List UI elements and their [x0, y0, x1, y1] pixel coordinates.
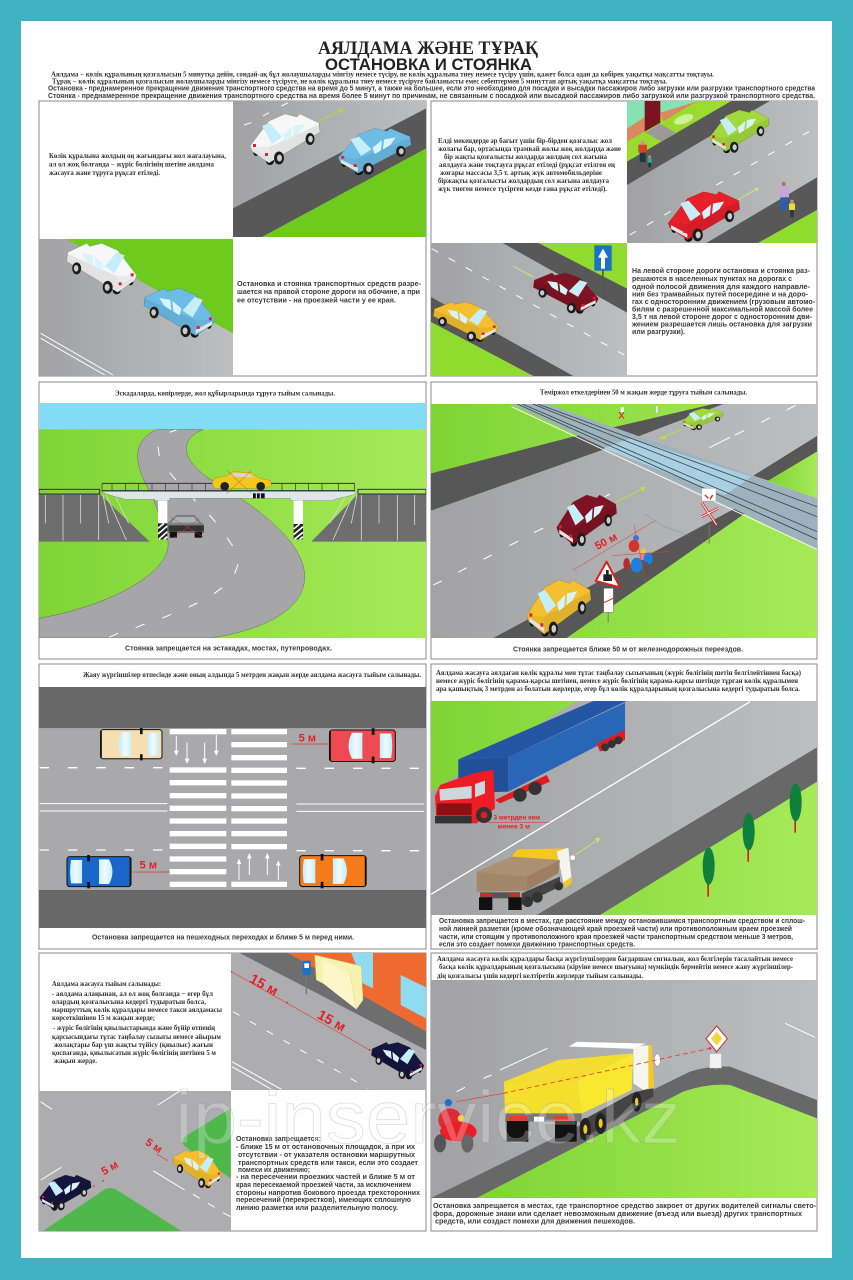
icon: motorcyclist [434, 1099, 477, 1153]
illustration: bus stop with 15 m marks: 15 м [315, 1006, 349, 1035]
text: Kazakh rule [437, 955, 794, 980]
text: Russian rule: одной полосой движения для каждого направле- [632, 283, 811, 291]
watermark: ip-inservice.kz [175, 1076, 681, 1159]
definitions text: Аялдама − көлік құралының қозғалысын 5 минутқа дейін, сондай-ақ бұл жолаушыларды мінгізу немесе түсіру, не көлік құралына тиеу немесе түсіру үшін, қажет болса одан да көбірек уақытқа мақсатты тоқтауы. [51, 70, 714, 78]
illustration: one-way road with sign [431, 243, 627, 376]
text: Kazakh rule: Аялдама жасауға аялдаған көлік құралы мен тұтас таңбалау сызығының (жүріс бөлігінің шетін белгілейтіннен басқа) [436, 669, 802, 677]
icon: grey car with cross [168, 516, 204, 538]
text: Russian rule: помехи их движению; [238, 1167, 310, 1174]
text: Russian rule: решаются в населенных пунктах на дорогах с [632, 276, 792, 283]
truck: red cab with blue trailer [435, 701, 627, 823]
definitions text: Стоянка - преднамеренное прекращение движения транспортного средства на время более 5 минут по причинам, не связанным с посадкой или высадкой пассажиров либо загрузкой или разгрузкой транспортного средства. [48, 92, 815, 100]
text: Russian rule: отсутствии - от указателя остановки маршрутных [238, 1152, 415, 1159]
illustration: intersection with 5 m marks: 5 м [100, 1159, 120, 1178]
text: Kazakh rule: дің қозғалысы үшін кедергі келтіретін жерлерде тыйым салынады. [437, 972, 643, 980]
caption: Russian: Стоянка запрещается на эстакадах, мостах, путепроводах. [125, 646, 332, 652]
panel: stopping on the right side [39, 101, 426, 376]
text: Kazakh rule [436, 669, 802, 693]
text: Russian rule: пересечений (перекрестков), имеющих сплошную [236, 1196, 411, 1204]
text: Kazakh rule: жасауға және тұруға рұқсат етіледі. [49, 169, 160, 177]
label: under 3 metres: 3 метрден кем [493, 814, 540, 821]
text: Kazakh rule: ал ол жоқ болғанда − жүріс бөлігінің шетіне аялдама [49, 160, 214, 168]
illustration: pedestrian crossing from above [39, 687, 426, 928]
illustration: street with building and pedestrians [627, 101, 817, 243]
text: Russian rule: стороны напротив бокового проезда трехсторонних [236, 1189, 420, 1197]
text: Kazakh rule: - жүріс бөлігінің қиылыстарында және бүйір өтпенің [53, 1024, 215, 1032]
label: 5 m top [291, 733, 330, 745]
text: Kazakh rule: - аялдама алаңынан, ал ол жоқ болғанда − егер бұл [52, 990, 213, 998]
text: Russian rule: На левой стороне дороги остановка и стоянка раз- [632, 267, 811, 275]
text: Kazakh rule: басқа көлік құралдарының қозғалысына (кіруіне немесе шығуына) мүмкіндік бермейтін немесе жаяу жүргіншілер- [439, 963, 794, 971]
text: Russian rule: края пересекаемой проезжей части, за исключением [236, 1181, 411, 1189]
text: Kazakh rule: біржақты қозғалысты жолдардың сол жағына аялдауға [438, 177, 609, 185]
label: under 3 metres: менее 3 м [498, 824, 530, 831]
panel: stopping on the left side [431, 101, 817, 376]
icon: crossing sign [702, 488, 718, 543]
text: Kazakh rule: бір жақты қозғалысты жолдарда жолдың сол жағына [444, 153, 607, 161]
text: Russian rule [631, 267, 816, 336]
text: Kazakh rule [438, 137, 621, 193]
panel: no stopping where signals are blocked [431, 953, 817, 1231]
illustration: overpass with road [39, 403, 426, 638]
truck: brown dump truck [477, 848, 575, 910]
text: Kazakh rule: көрсеткішінен 15 м жақын жерде; [52, 1014, 155, 1022]
text: Russian rule: ее отсутствии - на проезжей части у ее края. [237, 296, 396, 304]
text: Kazakh rule: немесе жүріс бөлігінің қарама-қарсы шетінен, немесе жүріс бөлігінің қарама-қарсы шетінде тұрған көлік құралымен [436, 677, 798, 685]
label: 5 m top: 5 м [299, 733, 316, 745]
title: Kazakh: АЯЛДАМА ЖӘНЕ ТҰРАҚ [318, 38, 538, 59]
text: Russian rule: Остановка запрещается: [236, 1136, 321, 1143]
title: Russian: ОСТАНОВКА И СТОЯНКА [325, 55, 532, 74]
caption: Russian: Остановка запрещается на пешеходных переходах и ближе 5 м перед ними. [92, 934, 354, 942]
text: Russian rule: шается на правой стороне дороги на обочине, а при [237, 288, 420, 296]
illustration: cars on the road edge, front view [39, 239, 233, 376]
panel: no stopping near bus stops and intersections [39, 953, 426, 1231]
text: Russian rule: ной линией разметки (кроме обозначающей край проезжей части) или противоположным краем проезжей [439, 925, 792, 933]
label: 5 m bottom [133, 860, 170, 872]
text: Russian rule [439, 918, 806, 948]
heading: Kazakh: Теміржол өткелдерінен 50 м жақын жерде тұруға тыйым салынады. [540, 388, 747, 396]
text: Kazakh rule [49, 152, 226, 177]
icon: small signs [619, 406, 658, 419]
text: Kazakh rule: қарсысындағы тұтас таңбалау сызығы немесе айырым [52, 1033, 221, 1041]
icon: motorcycle with sidecar, crossed out [612, 525, 668, 583]
text: Russian rule: 3,5 т на левой стороне дорог с односторонним дви- [632, 313, 813, 321]
text: Kazakh rule: Аялдама жасауға көлік құралдары басқа жүргізушілерден бағдаршам сигналын, жол белгілерін тасалайтын немесе [437, 955, 793, 963]
panel: no parking near railway crossings [431, 382, 817, 659]
text: Russian rule: или разгрузки). [632, 329, 685, 336]
text: Kazakh rule: Аялдама жасауға тыйым салынады: [52, 980, 161, 988]
icon: shelter [315, 955, 363, 1009]
illustration: railway crossing: 50 м [593, 531, 619, 553]
illustration: dump truck blocking a sign [431, 980, 817, 1198]
illustration: bus stop with 15 m marks [231, 953, 426, 1090]
text: Russian rule: транспортных средств или такси, если это создает [238, 1160, 419, 1167]
text: Russian rule: Остановка запрещается в местах, где расстояние между остановившимся транспортным средством и сплош- [439, 918, 806, 925]
text: Russian rule: ния без трамвайных путей посередине и на доро- [632, 290, 809, 298]
icon: trees [703, 783, 802, 897]
heading: Kazakh: Эскадаларда, көпірлерде, жол құбырларында тұруға тыйым салынады. [115, 390, 335, 398]
text: Kazakh rule: маршруттық көлік құралдары немесе такси аялдамасы [52, 1006, 222, 1014]
truck: yellow dump truck [504, 1042, 660, 1142]
text: Russian rule: если это создает помехи движению транспортных средств. [439, 942, 635, 948]
panel: no stopping when distance under 3 m [431, 664, 817, 949]
text: Russian rule: жением разрешается лишь остановка для загрузки [631, 322, 812, 328]
label: under 3 metres [487, 814, 549, 831]
text: Russian rule: Остановка и стоянка транспортных средств разре- [237, 281, 422, 288]
text: Russian rule: - на пересечении проезжих частей и ближе 5 м от [236, 1173, 416, 1181]
text: Russian rule: - ближе 15 м от остановочных площадок, а при их [236, 1143, 415, 1151]
text: Russian rule: гах с односторонним движением (грузовым автомо- [632, 299, 816, 306]
illustration: intersection with 5 m marks: 5 м [143, 1136, 164, 1156]
text: Kazakh rule: жақын жерде. [54, 1057, 97, 1065]
text: Kazakh rule: жолағы бар, ортасында трамвай жолы жоқ жолдарда және [438, 145, 621, 153]
illustration: railway crossing [431, 404, 817, 638]
heading: Kazakh: Жаяу жүргіншілер өтпесінде және оның алдында 5 метрден жақын жерде аялдама жасауға тыйым салынады. [83, 671, 421, 679]
definitions text [48, 70, 815, 100]
panel: no stopping at pedestrian crossings [39, 664, 426, 949]
illustration: intersection with 5 m marks [39, 1091, 231, 1231]
text: Russian rule [433, 1202, 817, 1226]
label: 5 m bottom: 5 м [140, 860, 157, 872]
definitions text: Остановка - преднамеренное прекращение движения транспортного средства на время до 5 минут, а также на большее, если это необходимо для посадки и высадки пассажиров либо загрузки или разгрузки транспортного средства [48, 84, 815, 92]
text: Russian rule: фора, дорожные знаки или сделает невозможным движение (въезд или выезд) других транспортных [433, 1211, 802, 1218]
illustration: truck and dump truck on road [431, 701, 817, 915]
text: Kazakh rule: қоспағанда, қиылысатын жүріс бөлігінің шетінен 5 м [52, 1049, 216, 1057]
text: Kazakh rule: ара қашықтық 3 метрден аз болатын жерлерде, егер бұл көлік құралдарының қозғалысына кедергі тудыратын болса. [436, 685, 800, 693]
text: Russian rule: линию разметки или разделительную полосу. [236, 1205, 398, 1212]
text: Russian rule [237, 281, 422, 304]
text: Russian rule: средств, или создаст помехи для движения пешеходов. [435, 1218, 635, 1226]
text: Kazakh rule: жолақтары бар үш жақты түйісу (қиылыс) жағын [54, 1041, 213, 1049]
text: Russian rule: Остановка запрещается в местах, где транспортное средство закроет от других водителей сигналы свето- [433, 1202, 817, 1210]
icon: railway warning sign [596, 562, 620, 622]
text: Kazakh rule: жүк тиеген немесе түсірген кезде ғана рұқсат етіледі). [438, 185, 607, 193]
text: Kazakh rule: жоғары массасы 3,5 т. артық жүк автомобильдеріне [440, 169, 602, 177]
text: Kazakh rule: олардың қозғалысына кедергі тудыратын болса, [52, 998, 206, 1006]
caption: Russian: Стоянка запрещается ближе 50 м от железнодорожных переездов. [513, 646, 743, 654]
header: title and definitions [48, 38, 815, 100]
illustration: cars at shoulder, rear view [233, 101, 426, 237]
text: Kazakh rule: Көлік құралына жолдың оң жағындағы жол жағалауына, [49, 152, 226, 160]
text: Kazakh rule: Елді мекендерде әр бағыт үшін бір-бірден қозғалыс жол [438, 137, 612, 145]
text: Russian rule: части, или стоящим у противоположного края проезжей части транспортным средством меньше 3 метров, [439, 933, 793, 941]
text: Kazakh rule [52, 980, 222, 1065]
icon: yellow car with cross [212, 470, 271, 494]
text: Russian rule: билям с разрешенной максимальной массой более [632, 306, 813, 314]
icon: bus stop sign [303, 961, 311, 994]
text: Russian rule [236, 1136, 420, 1212]
illustration: bus stop with 15 m marks: 15 м [247, 970, 281, 999]
panel: no parking on overpasses [39, 382, 426, 659]
icon: priority road sign [706, 1026, 727, 1070]
definitions text: Тұрақ − көлік құралының қозғалысын жолаушыларды мінгізу немесе түсіруге, не көлік құралына тиеу немесе түсіруге байланысты емес себептермен 5 минуттан артық уақытқа мақсатты тоқтауы. [52, 78, 667, 86]
text: Kazakh rule: аялдауға және тоқтауға рұқсат етіледі (рұқсат етілген ең [439, 161, 615, 169]
